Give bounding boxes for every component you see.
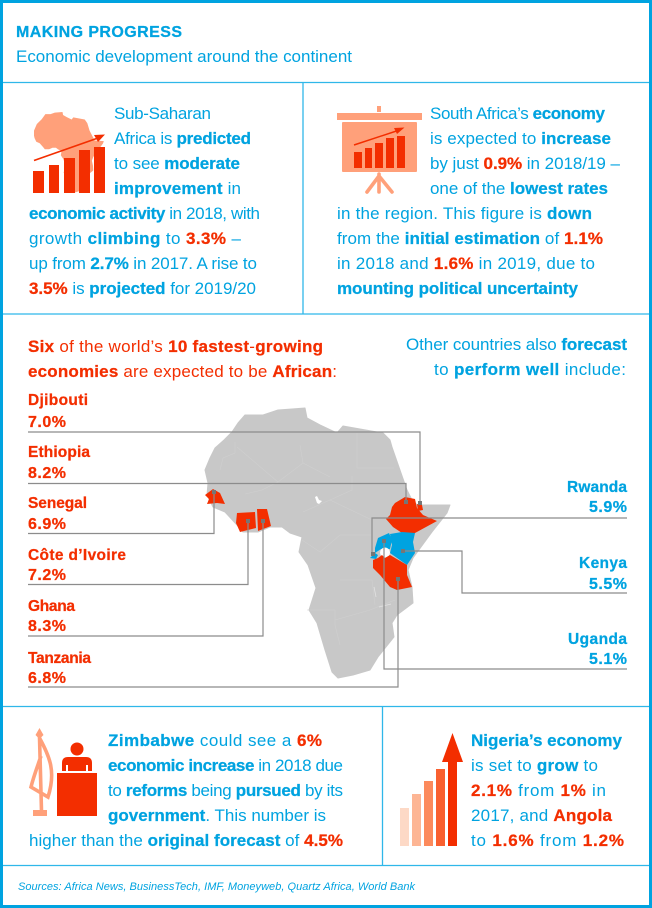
text block: South Africa outlook: by just 0.9% in 2018/19 –: [430, 154, 621, 173]
heading: six of ten fastest-growing: [28, 337, 337, 381]
labels: blue countries: [567, 479, 627, 668]
text block: Zimbabwe forecast: to reforms being pursued by its: [108, 781, 343, 800]
title: MAKING PROGRESS: [16, 24, 182, 41]
text block: South Africa outlook: one of the lowest rates: [430, 179, 608, 198]
label: Uganda: 5.1%: [589, 651, 627, 668]
text block: Zimbabwe forecast: government. This number is: [108, 806, 326, 825]
text block: South Africa outlook: [337, 104, 621, 298]
country: Côte d'Ivoire: [236, 512, 256, 532]
label: Tanzania: Tanzania: [28, 650, 91, 667]
text block: South Africa outlook: in 2018 and 1.6% in 2019, due to: [337, 254, 595, 273]
country: Rwanda: [370, 553, 378, 559]
text block: Nigeria and Angola forecast: 2.1% from 1% in: [471, 781, 606, 800]
text block: Nigeria and Angola forecast: to 1.6% from 1.2%: [471, 831, 624, 850]
text block: Sub-Saharan Africa outlook: Sub-Saharan: [114, 104, 211, 123]
icon: presentation board with chart: [337, 106, 422, 192]
text block: Zimbabwe forecast: [29, 731, 343, 850]
text block: Sub-Saharan Africa outlook: [29, 104, 260, 298]
heading: other countries: [406, 335, 627, 379]
label: Ghana: 8.3%: [28, 618, 66, 635]
text block: South Africa outlook: from the initial estimation of 1.1%: [337, 229, 603, 248]
label: Tanzania: 6.8%: [28, 670, 66, 687]
label: Côte d'Ivoire: [28, 547, 126, 584]
label: Côte d'Ivoire: 7.2%: [28, 567, 66, 584]
text block: Sub-Saharan Africa outlook: improvement in: [114, 179, 241, 198]
text block: Nigeria and Angola forecast: 2017, and Angola: [471, 806, 613, 825]
label: Djibouti: [28, 392, 88, 431]
labels: red countries: [28, 392, 126, 687]
map of Africa: [205, 408, 450, 678]
label: Uganda: Uganda: [568, 631, 627, 648]
heading: six of ten fastest-growing: Six of the world’s 10 fastest-growing: [28, 337, 323, 356]
text block: Sub-Saharan Africa outlook: economic activity in 2018, with: [29, 204, 260, 223]
text block: Sub-Saharan Africa outlook: Africa is predicted: [114, 129, 251, 148]
label: Senegal: Senegal: [28, 495, 87, 512]
label: Ethiopia: 8.2%: [28, 465, 66, 482]
text block: South Africa outlook: South Africa’s economy: [430, 104, 606, 123]
icon: Africa with rising bar chart: [33, 112, 105, 193]
label: Senegal: 6.9%: [28, 516, 66, 533]
label: Ghana: Ghana: [28, 598, 75, 615]
leader lines: [28, 432, 627, 687]
label: Uganda: [568, 631, 627, 668]
country: Tanzania: [373, 555, 412, 590]
lake: [380, 548, 390, 558]
country: Djibouti: [417, 504, 423, 511]
panel: South Africa: [337, 104, 621, 298]
heading: other countries: Other countries also forecast: [406, 335, 627, 354]
country: Ethiopia: [386, 497, 437, 533]
heading: other countries: to perform well include:: [434, 360, 626, 379]
label: Ghana: [28, 598, 75, 635]
text block: Nigeria and Angola forecast: Nigeria’s economy: [471, 731, 623, 750]
label: Djibouti: Djibouti: [28, 392, 88, 409]
subtitle: Economic development around the continent: [16, 47, 352, 66]
icon: rising bars with arrow: [400, 733, 463, 846]
label: Senegal: [28, 495, 87, 533]
label: Kenya: 5.5%: [589, 576, 627, 593]
text block: Sub-Saharan Africa outlook: up from 2.7% in 2017. A rise to: [29, 254, 257, 273]
panel: Nigeria and Angola: [400, 731, 624, 850]
header: [16, 24, 352, 66]
label: Kenya: Kenya: [579, 555, 627, 572]
label: Rwanda: 5.9%: [589, 499, 627, 516]
text block: Nigeria and Angola forecast: [471, 731, 624, 850]
panel: Sub-Saharan Africa: [29, 104, 260, 298]
text block: Zimbabwe forecast: higher than the original forecast of 4.5%: [29, 831, 343, 850]
text block: Sub-Saharan Africa outlook: to see moderate: [114, 154, 240, 173]
text block: South Africa outlook: in the region. This figure is down: [337, 204, 592, 223]
country: Uganda: [375, 533, 392, 553]
label: Rwanda: [567, 479, 627, 516]
panel: fastest-growing economies map: [28, 335, 627, 687]
label: Djibouti: 7.0%: [28, 414, 66, 431]
panel: Zimbabwe: [29, 728, 343, 850]
icon: flag and speaker at podium: [31, 728, 97, 816]
country: Ghana: [257, 509, 271, 531]
text block: Sub-Saharan Africa outlook: 3.5% is projected for 2019/20: [29, 279, 256, 298]
sources: Sources: Africa News, BusinessTech, IMF, Moneyweb, Quartz Africa, World Bank: [18, 881, 416, 893]
label: Côte d'Ivoire: Côte d’Ivoire: [28, 547, 126, 564]
label: Ethiopia: [28, 444, 90, 482]
text block: Nigeria and Angola forecast: is set to grow to: [471, 756, 598, 775]
country: Senegal: [205, 489, 225, 504]
label: Tanzania: [28, 650, 91, 687]
heading: six of ten fastest-growing: economies are expected to be African:: [28, 362, 337, 381]
country: Kenya: [390, 532, 415, 565]
label: Ethiopia: Ethiopia: [28, 444, 90, 461]
text block: South Africa outlook: mounting political uncertainty: [337, 279, 579, 298]
label: Rwanda: Rwanda: [567, 479, 627, 496]
text block: South Africa outlook: is expected to increase: [430, 129, 611, 148]
label: Kenya: [579, 555, 627, 593]
text block: Zimbabwe forecast: Zimbabwe could see a 6%: [108, 731, 322, 750]
text block: Zimbabwe forecast: economic increase in 2018 due: [108, 756, 343, 775]
text block: Sub-Saharan Africa outlook: growth climbing to 3.3% –: [29, 229, 242, 248]
